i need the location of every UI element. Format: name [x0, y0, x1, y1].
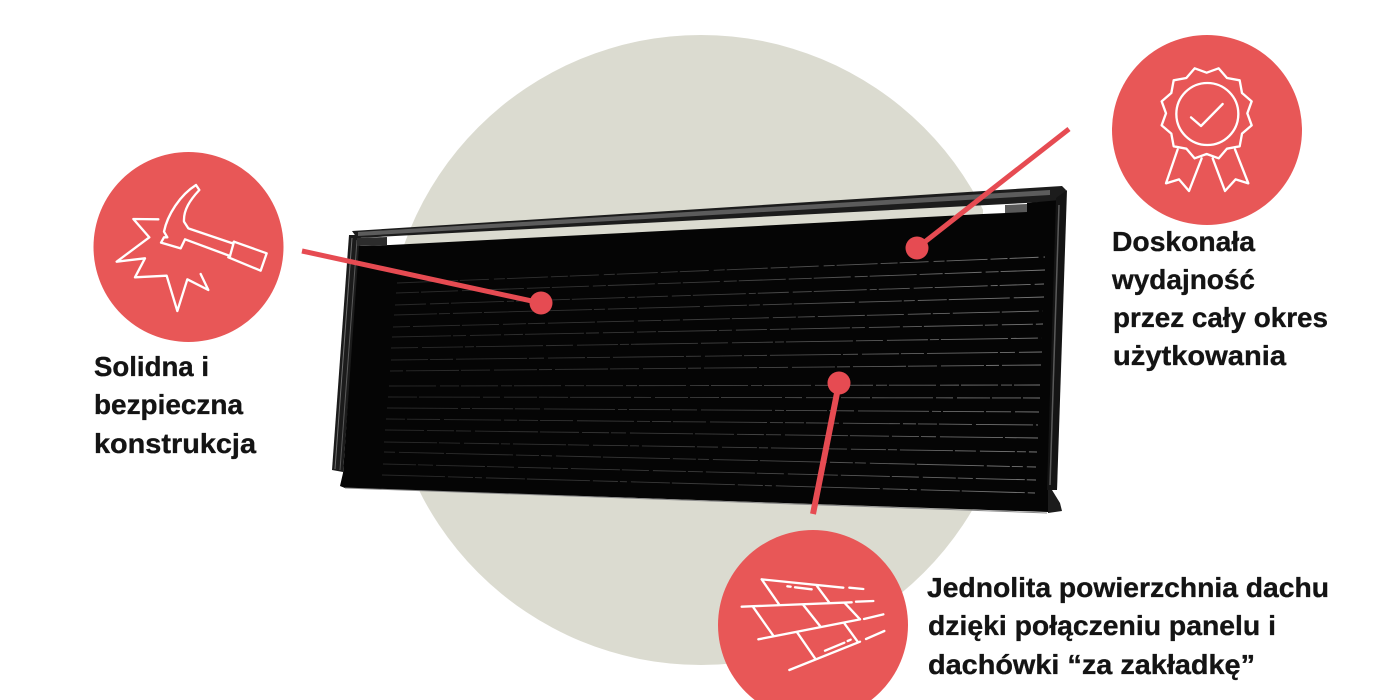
panel body [340, 200, 1060, 512]
white sliver [983, 205, 1005, 214]
text: top right callout [1111, 226, 1328, 371]
panel right frame [1047, 190, 1067, 490]
text: bottom callout [927, 572, 1329, 680]
text: bottom callout: dachówki “za zakładkę” [928, 649, 1255, 680]
text: left callout: Solidna i [94, 351, 209, 382]
text: left callout: bezpieczna [94, 389, 243, 420]
icon: roof tiles [718, 530, 908, 700]
grey sliver [1005, 204, 1027, 213]
panel bottom edge [345, 488, 1047, 513]
text: bottom callout: Jednolita powierzchnia dachu [927, 572, 1329, 603]
connector: bottom callout [813, 372, 850, 514]
text: left callout: konstrukcja [94, 428, 256, 459]
text: top right callout: przez cały okres [1113, 302, 1328, 333]
connector: top right callout [906, 129, 1069, 260]
icon: hammer [94, 152, 284, 342]
solar panel [332, 186, 1067, 513]
text: top right callout: Doskonała [1112, 226, 1255, 257]
panel top rail [352, 186, 1066, 238]
text: bottom callout: dzięki połączeniu panelu i [928, 610, 1276, 641]
connector: left callout [302, 251, 552, 314]
text: top right callout: użytkowania [1113, 340, 1286, 371]
text: left callout [94, 351, 256, 459]
text: top right callout: wydajność [1111, 264, 1255, 295]
top left frame corner [357, 237, 387, 246]
cell lines [382, 257, 1045, 493]
background circle [386, 35, 1016, 665]
panel left frame [332, 235, 361, 472]
connector [1048, 490, 1062, 513]
icon: award rosette [1112, 35, 1302, 225]
